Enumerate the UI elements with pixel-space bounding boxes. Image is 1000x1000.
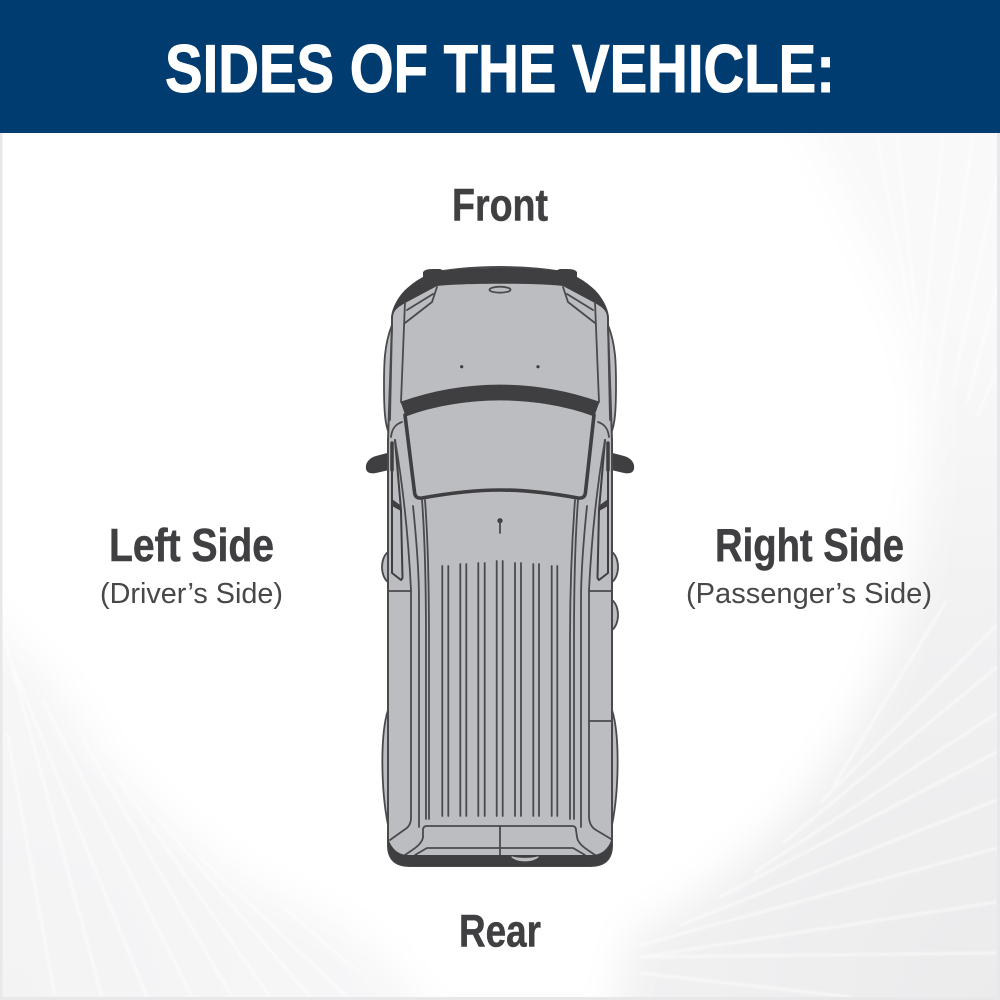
side windows and door lines <box>388 422 612 840</box>
antenna <box>497 518 503 533</box>
label: left side: Left Side <box>109 519 274 571</box>
label: right side <box>686 519 932 610</box>
tailgate <box>405 826 595 855</box>
header banner <box>0 0 1000 133</box>
title: SIDES OF THE VEHICLE: <box>165 31 835 107</box>
label: right side: Right Side <box>715 519 904 571</box>
hood details <box>390 287 610 420</box>
label: rear: Rear <box>459 906 541 956</box>
front dark cap <box>392 268 608 317</box>
windshield <box>401 385 599 498</box>
roof slats <box>442 561 557 816</box>
label: right side: (Passenger’s Side) <box>686 578 932 610</box>
rear dark bumper <box>388 838 612 866</box>
wheels <box>382 325 618 825</box>
label: left side <box>100 519 283 610</box>
mirrors <box>366 451 634 473</box>
vehicle: top-down view <box>366 267 634 866</box>
body shell <box>388 267 612 866</box>
label: front: Front <box>452 180 548 230</box>
label: left side: (Driver’s Side) <box>100 578 283 610</box>
